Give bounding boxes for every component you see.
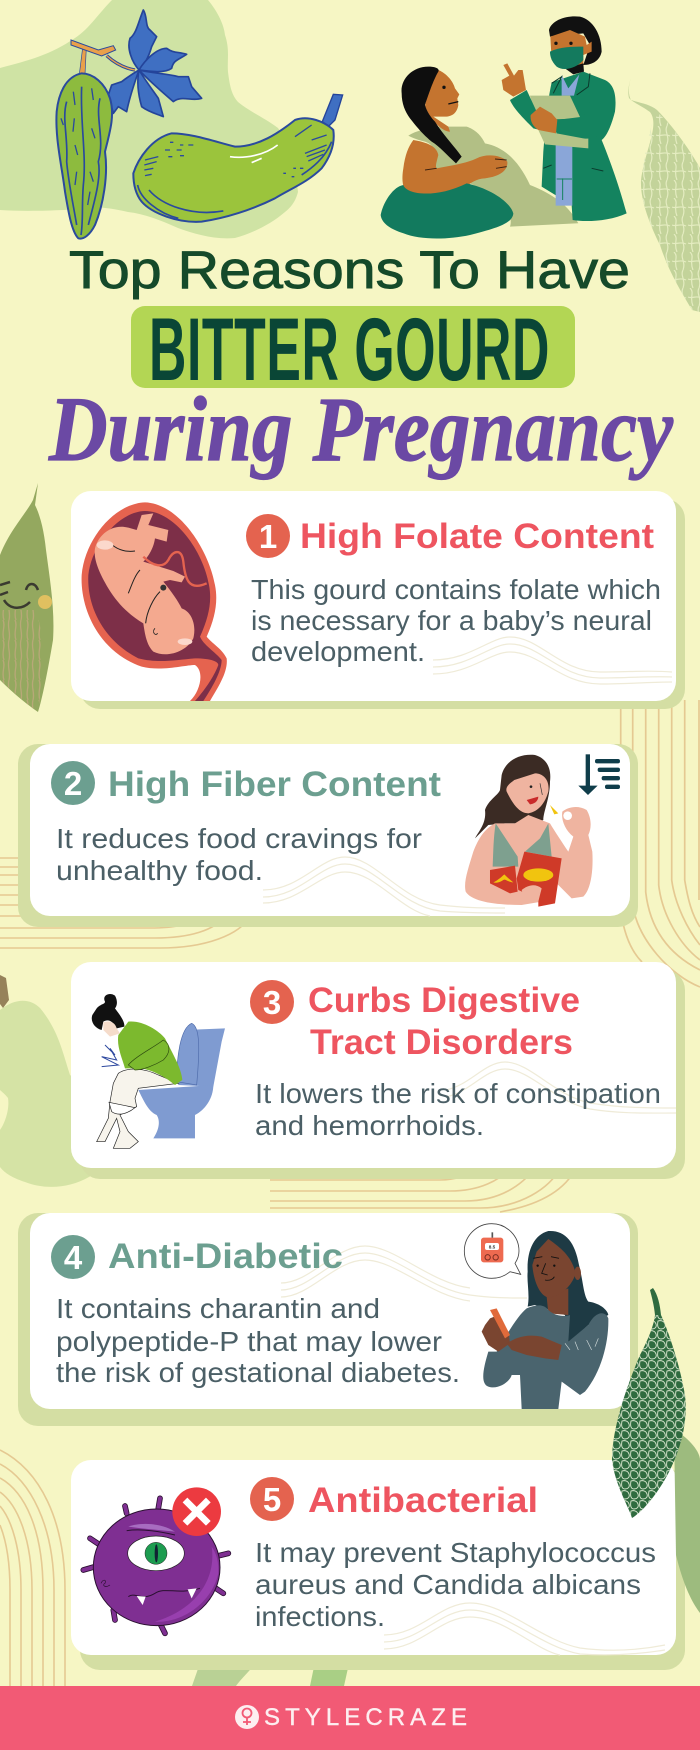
heading: Tract Disorders <box>310 1023 573 1062</box>
number badge 2: 2 <box>64 765 82 802</box>
decorative olive gourd with face <box>0 483 53 712</box>
body text: aureus and Candida albicans <box>255 1569 641 1600</box>
title line 1: Top Reasons To Have <box>69 241 630 300</box>
icon: woman eating chips <box>465 755 593 907</box>
body text <box>251 574 661 667</box>
heading: Antibacterial <box>308 1481 538 1520</box>
decorative pear shape left <box>0 975 100 1187</box>
scrubs <box>562 74 579 96</box>
number badge 1 <box>246 514 290 558</box>
panel: card 4 anti-diabetic <box>18 1213 638 1426</box>
body text: development. <box>251 636 425 667</box>
fruit <box>56 73 112 239</box>
body text: polypeptide-P that may lower <box>56 1326 442 1357</box>
leaves <box>108 10 202 117</box>
wave decoration <box>446 1062 676 1113</box>
body text: infections. <box>255 1601 385 1632</box>
icon: downward sort arrow <box>578 754 620 795</box>
number badge 5 <box>250 1477 294 1521</box>
decorative concentric arches bottom left <box>0 1450 65 1686</box>
decorative concentric lines centre <box>270 1168 576 1212</box>
stem and branch <box>79 48 86 74</box>
heading: Anti-Diabetic <box>108 1237 343 1276</box>
heading: High Folate Content <box>300 517 654 556</box>
bottom leaves behind card 5 <box>192 1650 348 1686</box>
body text <box>255 1078 661 1141</box>
wave decoration <box>263 857 505 916</box>
wave decoration <box>433 637 672 684</box>
background blob behind gourds <box>0 0 298 238</box>
icon: woman on toilet <box>92 994 225 1148</box>
raised hand <box>502 63 526 97</box>
hand on clipboard <box>531 107 557 133</box>
number badge 3: 3 <box>263 984 281 1021</box>
mask <box>550 47 583 69</box>
wave decoration <box>384 1603 665 1655</box>
body text: It may prevent Staphylococcus <box>255 1537 656 1568</box>
hair <box>549 16 602 65</box>
number badge 5: 5 <box>263 1481 281 1518</box>
heading: High Fiber Content <box>108 765 441 804</box>
logo mark <box>235 1705 259 1729</box>
icon: bacteria with red cross <box>83 1487 228 1633</box>
illustration: large green gourd <box>133 94 343 222</box>
icon: woman testing blood sugar <box>482 1231 608 1409</box>
body text: It lowers the risk of constipation <box>255 1078 661 1109</box>
arm <box>402 140 507 196</box>
panel: card 3 curbs digestive tract disorders <box>71 962 685 1179</box>
skirt <box>381 183 513 239</box>
illustration: hanging bitter gourd with leaves <box>56 10 202 239</box>
number badge 1: 1 <box>259 518 277 555</box>
number badge 2 <box>51 761 95 805</box>
face <box>550 30 592 68</box>
sleeves <box>557 82 613 139</box>
decorative concentric lines left <box>0 858 250 948</box>
panel: card 2 high fiber content <box>18 744 638 927</box>
clipboard <box>530 96 588 148</box>
face <box>425 70 459 132</box>
heading: Curbs Digestive <box>308 981 580 1020</box>
vine <box>107 56 135 70</box>
panel: card 1 high folate content <box>71 491 685 709</box>
dress <box>408 127 578 227</box>
body text: It reduces food cravings for <box>56 823 422 854</box>
body text: It contains charantin and <box>56 1293 380 1324</box>
number badge 4: 4 <box>64 1239 83 1276</box>
body text: the risk of gestational diabetes. <box>56 1357 460 1388</box>
number badge 4 <box>51 1235 95 1279</box>
body text <box>255 1537 656 1632</box>
brand name: STYLECRAZE <box>264 1704 467 1731</box>
footer band <box>0 1686 700 1750</box>
decorative side gourd lower right <box>674 1430 700 1613</box>
icon: speech bubble with glucose meter <box>464 1224 521 1278</box>
body text: This gourd contains folate which <box>251 574 661 605</box>
illustration: pregnant woman <box>381 67 578 239</box>
body text: is necessary for a baby’s neural <box>251 605 652 636</box>
body text <box>56 1293 460 1388</box>
heading <box>308 981 580 1062</box>
coat <box>542 72 627 221</box>
body text <box>56 823 422 886</box>
decorative concentric lines right <box>621 700 700 987</box>
wave decoration <box>281 1246 527 1301</box>
illustration: doctor with mask <box>502 16 627 221</box>
decorative faded gourd top right <box>628 75 700 312</box>
number badge 3 <box>250 980 294 1024</box>
decorative dark green gourd <box>612 1288 686 1518</box>
icon: speech bubble with glucose meter: 8.5 <box>489 1244 496 1249</box>
icon: fetus in womb <box>82 502 227 701</box>
body text: unhealthy food. <box>56 855 263 886</box>
body text: and hemorrhoids. <box>255 1110 484 1141</box>
panel: card 5 antibacterial <box>71 1460 685 1670</box>
red cross <box>172 1487 221 1536</box>
hair and braid <box>402 67 462 163</box>
